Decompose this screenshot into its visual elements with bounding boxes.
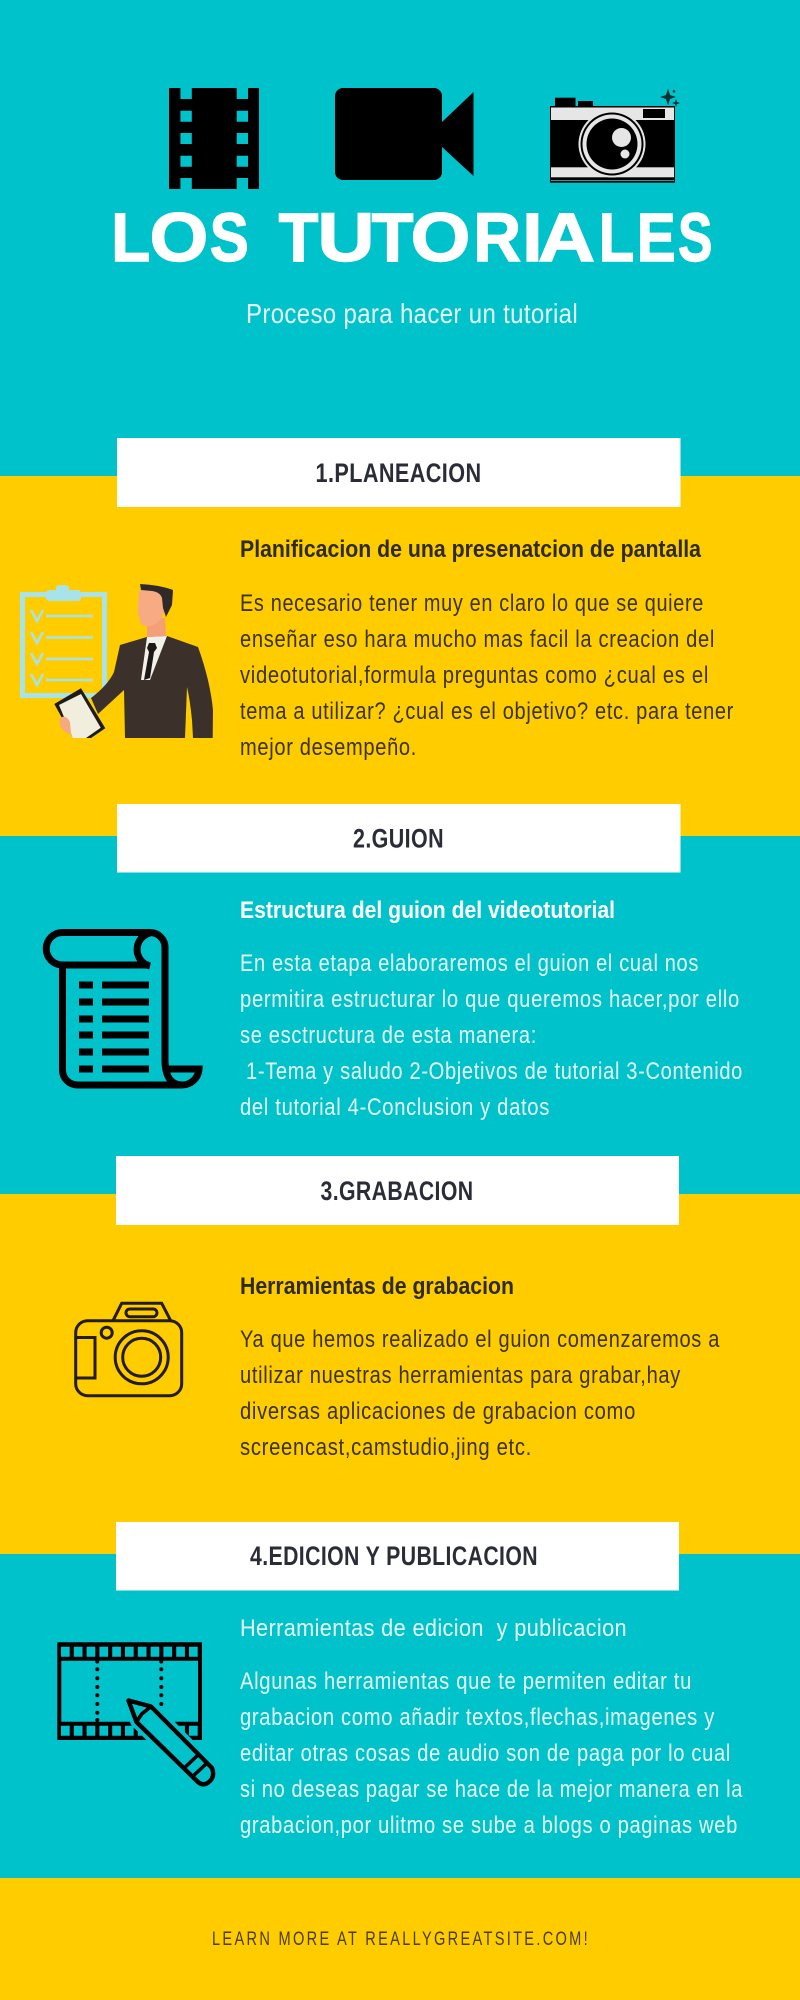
body text: screencast,camstudio,jing etc. xyxy=(240,1434,532,1461)
body text xyxy=(240,950,743,1121)
title: A xyxy=(538,199,595,276)
illustration: businessman with checklist xyxy=(22,584,213,738)
heading box: 1.PLANEACION xyxy=(117,438,680,507)
heading box: 4.EDICION Y PUBLICACION: 4.EDICION Y PUBLICACION xyxy=(250,1541,538,1571)
body text xyxy=(240,1326,720,1461)
title: R xyxy=(473,199,521,276)
footer text: LEARN MORE AT REALLYGREATSITE.COM! xyxy=(212,1929,590,1950)
title: S xyxy=(210,199,249,276)
body text: se esctructura de esta manera: xyxy=(240,1022,537,1049)
icon: photo camera xyxy=(550,88,680,183)
title: I xyxy=(522,199,542,276)
body text: utilizar nuestras herramientas para grabar,hay xyxy=(240,1362,681,1389)
body text: Ya que hemos realizado el guion comenzaremos a xyxy=(240,1326,720,1353)
title: L xyxy=(111,199,150,276)
panel: 1 planeacion xyxy=(0,438,800,836)
title: T xyxy=(279,199,318,276)
icon: video camera xyxy=(335,88,474,180)
icon: film strip xyxy=(169,88,259,189)
heading box: 2.GUION: 2.GUION xyxy=(353,824,444,854)
body text: del tutorial 4-Conclusion y datos xyxy=(240,1094,550,1121)
body text: grabacion como añadir textos,flechas,imagenes y xyxy=(240,1704,715,1731)
body text: En esta etapa elaboraremos el guion el cual nos xyxy=(240,950,699,977)
heading box: 4.EDICION Y PUBLICACION xyxy=(116,1522,679,1590)
title: U xyxy=(318,199,374,276)
body text xyxy=(240,590,734,761)
title: L xyxy=(599,199,634,276)
heading box: 3.GRABACION: 3.GRABACION xyxy=(320,1176,474,1206)
icon: camera outline xyxy=(76,1303,182,1396)
heading box: 3.GRABACION xyxy=(116,1156,679,1225)
heading box: 2.GUION xyxy=(117,804,680,872)
icon: film and pencil xyxy=(57,1642,213,1784)
panel: 3 grabacion xyxy=(0,1156,800,1554)
body text: Es necesario tener muy en claro lo que se quiere xyxy=(240,590,704,617)
panel: 2 guion xyxy=(0,804,800,1194)
title: S xyxy=(678,199,712,276)
subheading: Herramientas de grabacion xyxy=(240,1273,514,1300)
man xyxy=(54,584,213,738)
icon: script scroll xyxy=(46,932,199,1085)
title: E xyxy=(637,199,676,276)
title: T xyxy=(372,199,413,276)
header section xyxy=(111,88,712,329)
title: O xyxy=(150,199,208,276)
subheading: Herramientas de edicion y publicacion xyxy=(240,1615,627,1642)
body text: diversas aplicaciones de grabacion como xyxy=(240,1398,636,1425)
body text: Algunas herramientas que te permiten editar tu xyxy=(240,1668,692,1695)
subheading: Planificacion de una presenatcion de pantalla xyxy=(240,536,702,563)
subtitle: Proceso para hacer un tutorial xyxy=(246,298,578,329)
footer band xyxy=(0,1878,800,2000)
body text xyxy=(240,1668,743,1839)
clipboard xyxy=(22,585,104,696)
body text: enseñar eso hara mucho mas facil la creacion del xyxy=(240,626,715,653)
subheading: Estructura del guion del videotutorial xyxy=(240,897,615,924)
heading box: 1.PLANEACION: 1.PLANEACION xyxy=(316,458,482,488)
panel: 4 edicion y publicacion xyxy=(0,1522,800,1878)
body text: mejor desempeño. xyxy=(240,734,417,761)
title: O xyxy=(411,199,470,276)
body text: videotutorial,formula preguntas como ¿cual es el xyxy=(240,662,709,689)
